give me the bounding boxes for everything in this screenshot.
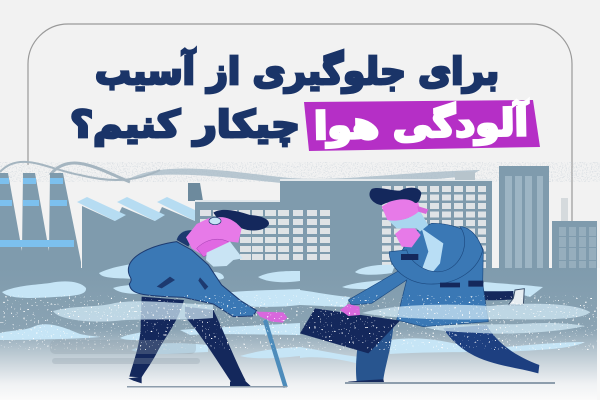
old man coat details (157, 277, 208, 290)
title line 2 label box: آلودگی هوا (314, 99, 530, 148)
cane (265, 320, 286, 387)
rounded frame (28, 24, 572, 222)
pale clouds back (0, 264, 585, 365)
businessman hair (369, 188, 421, 205)
ground shadows (127, 382, 555, 388)
businessman shirt and tie (422, 228, 443, 273)
businessman coat (348, 223, 488, 327)
watermark (50, 340, 200, 364)
old man coat (128, 242, 257, 317)
businessman hand on briefcase (340, 304, 360, 316)
businessman (300, 188, 539, 383)
smog band (0, 162, 600, 186)
businessman arm (389, 227, 483, 284)
mask (387, 210, 428, 232)
tissue (206, 242, 243, 267)
factory chimneys (0, 173, 81, 270)
businessman shoes (348, 379, 384, 383)
falling particles (0, 295, 597, 350)
city ground (0, 268, 597, 400)
businessman front leg (356, 327, 393, 382)
title line 2 end: چیکار کنیم؟ (70, 103, 300, 146)
title line 1: برای جلوگیری از آسیب (95, 48, 499, 93)
businessman back leg (443, 325, 539, 373)
old man hand on cane (256, 312, 287, 323)
arm badge (401, 254, 418, 260)
old man face (186, 217, 242, 256)
middle building left (188, 180, 390, 271)
old man glasses (209, 217, 221, 225)
old man legs (128, 297, 251, 386)
businessman face (382, 196, 420, 221)
trailing scarf (438, 284, 524, 305)
tall tower (499, 166, 549, 286)
middle building right (280, 172, 492, 280)
businessman hand (395, 228, 421, 247)
factory hall with sawtooth roof (77, 197, 195, 270)
old man hair (213, 210, 269, 231)
old man (128, 210, 287, 387)
old man collar (177, 230, 197, 247)
old man hand on face (197, 239, 230, 257)
belt (440, 281, 483, 287)
mask tie (417, 206, 428, 214)
briefcase (300, 308, 400, 353)
right building (552, 198, 597, 301)
front translucent smog (53, 301, 590, 334)
